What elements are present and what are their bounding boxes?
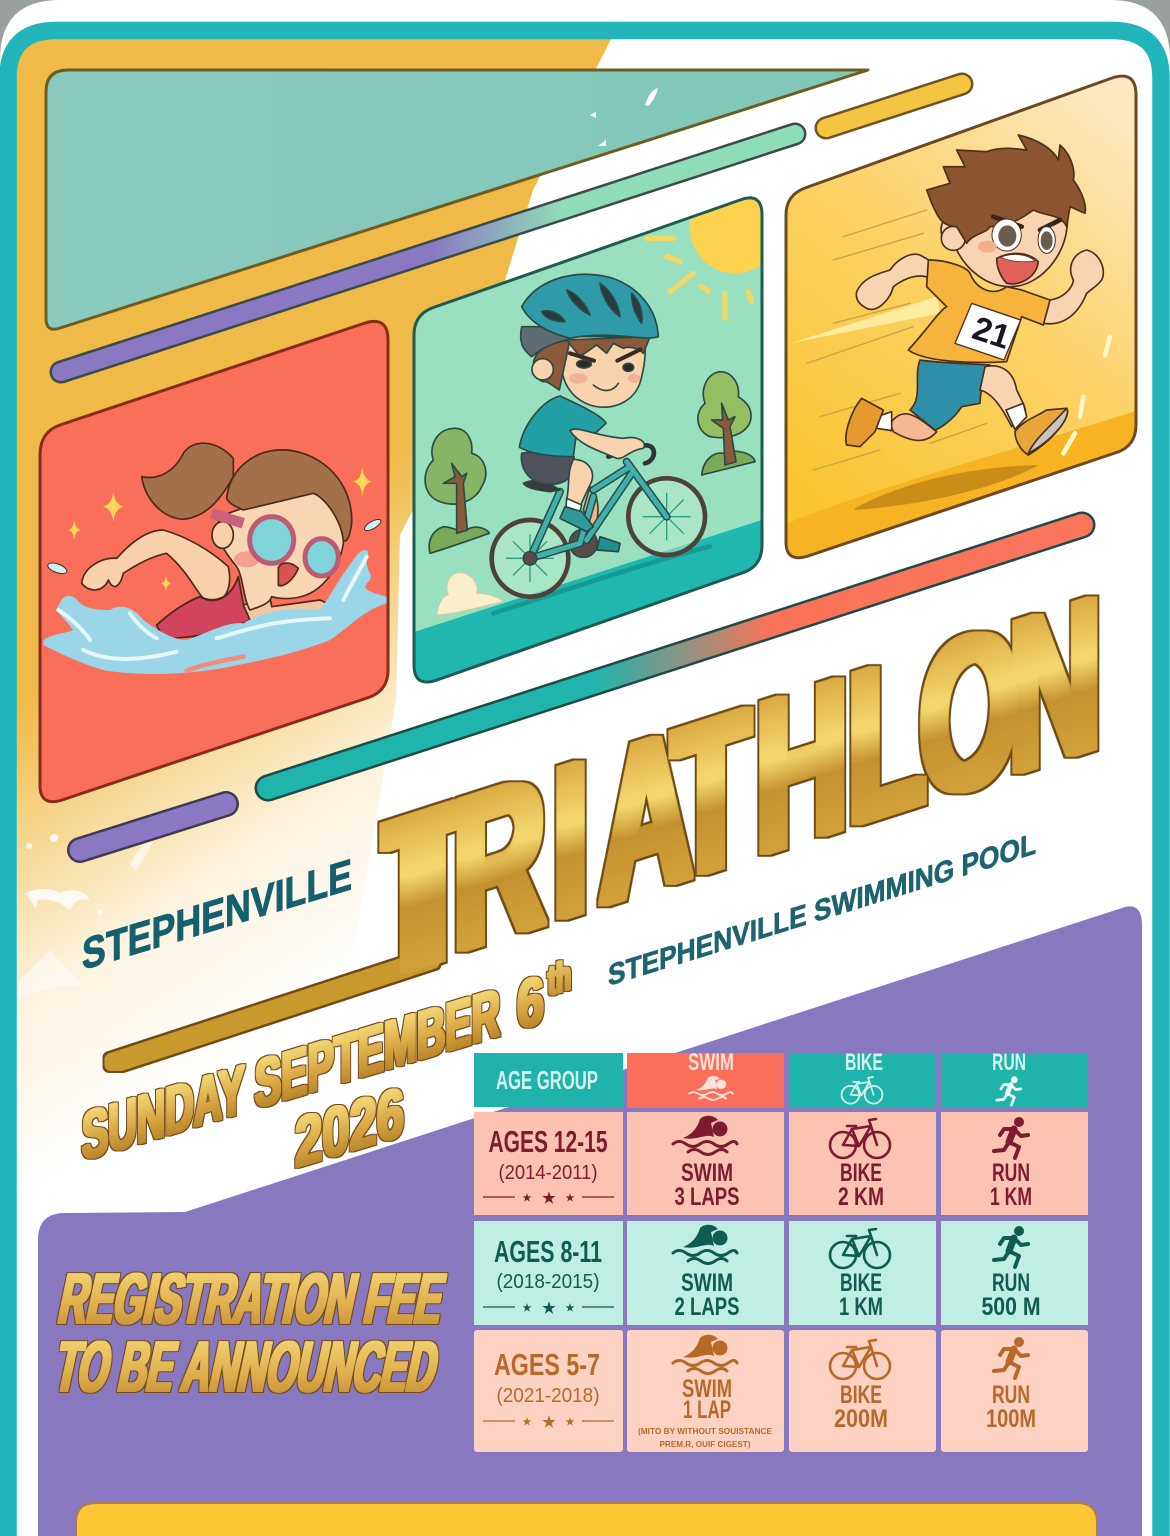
date line: SUNDAY SEPTEMBER <box>82 973 500 1175</box>
white splashes on gold background <box>16 832 158 1000</box>
date line <box>82 952 571 1175</box>
panel: cyclist <box>410 183 780 690</box>
gold diagonal background <box>8 30 616 1240</box>
row: ages 8-11: ★ <box>566 1303 575 1314</box>
date line: th <box>548 952 571 1005</box>
row: ages 12-15: 1 KM <box>990 1183 1032 1211</box>
panel: runner <box>780 76 1150 570</box>
panel: swimmer <box>40 321 388 802</box>
row: ages 8-11: BIKE <box>840 1269 882 1297</box>
purple to mint pill <box>61 134 795 372</box>
row: ages 8-11: 1 KM <box>839 1293 883 1321</box>
row: ages 12-15: ★ <box>566 1193 575 1204</box>
icon: swimmer girl <box>43 443 387 674</box>
row: ages 8-11: SWIM <box>681 1269 733 1297</box>
table header: AGE GROUP <box>496 1065 598 1095</box>
row: ages 5-7: 100M <box>986 1405 1036 1433</box>
table header: RUN <box>992 1049 1026 1076</box>
top teal banner shape <box>46 70 868 329</box>
registration fee callout: TO BE ANNOUNCED <box>49 1328 445 1407</box>
row: ages 12-15: BIKE <box>840 1159 882 1187</box>
row: ages 8-11: 500 M <box>982 1293 1040 1321</box>
row: ages 5-7: ★ <box>523 1417 532 1428</box>
row: ages 12-15 <box>474 1112 1088 1215</box>
runner panel outline <box>786 76 1136 558</box>
row: ages 12-15: AGES 12-15 <box>488 1124 608 1159</box>
table header: SWIM <box>688 1049 734 1076</box>
gold pill <box>826 84 962 128</box>
row: ages 12-15: 2 KM <box>838 1183 884 1211</box>
cyclist panel outline <box>414 198 762 682</box>
table header: BIKE <box>845 1049 883 1076</box>
row: ages 5-7: ★ <box>566 1417 575 1428</box>
row: ages 8-11: (2018-2015) <box>496 1271 600 1293</box>
row: ages 12-15: 3 LAPS <box>674 1183 740 1211</box>
row: ages 12-15: ★ <box>542 1190 556 1207</box>
heading: venue: STEPHENVILLE SWIMMING POOL <box>608 826 1036 993</box>
row: ages 5-7: 200M <box>834 1405 888 1433</box>
table header <box>474 1049 1088 1108</box>
row: ages 8-11: AGES 8-11 <box>494 1234 602 1269</box>
row: ages 8-11: ★ <box>542 1300 556 1317</box>
table: age groups and distances <box>474 1049 1088 1452</box>
row: ages 5-7: (MITO BY WITHOUT SOUISTANCE <box>638 1427 773 1436</box>
row: ages 8-11 <box>474 1221 1088 1325</box>
row: ages 12-15: SWIM <box>681 1159 733 1187</box>
yellow bottom bar <box>76 1503 1097 1536</box>
row: ages 12-15: (2014-2011) <box>498 1162 598 1184</box>
row: ages 5-7 <box>474 1330 1088 1452</box>
row: ages 5-7: PREM.R, OUIF CIGEST) <box>660 1440 751 1449</box>
row: ages 5-7: SWIM <box>682 1375 732 1403</box>
heading: Stephenville: STEPHENVILLE <box>82 849 352 980</box>
registration fee callout: REGISTRATION FEE <box>53 1260 451 1339</box>
row: ages 5-7: 1 LAP <box>683 1396 731 1424</box>
row: ages 12-15: ★ <box>523 1193 532 1204</box>
row: ages 8-11: RUN <box>992 1269 1030 1297</box>
race number: 21 <box>968 310 1015 357</box>
title: Triathlon in gold with underline bar: TRIATHLON <box>383 550 1101 1021</box>
icon: cyclist scene <box>416 199 760 681</box>
date year: 2026 <box>295 1072 404 1183</box>
teal to coral pill <box>268 525 1082 788</box>
date line: 6 <box>517 960 544 1045</box>
title: Triathlon in gold with underline bar <box>116 550 1101 1062</box>
registration fee callout <box>49 1260 451 1407</box>
row: ages 8-11: ★ <box>523 1303 532 1314</box>
purple pill <box>80 804 226 850</box>
row: ages 5-7: BIKE <box>840 1381 882 1409</box>
row: ages 5-7: ★ <box>542 1414 556 1431</box>
row: ages 12-15: RUN <box>992 1159 1030 1187</box>
purple lower panel <box>38 906 1142 1536</box>
row: ages 5-7: RUN <box>992 1381 1030 1409</box>
icon: runner scene <box>780 135 1150 570</box>
row: ages 5-7: (2021-2018) <box>496 1385 600 1407</box>
row: ages 5-7: AGES 5-7 <box>494 1347 600 1382</box>
row: ages 8-11: 2 LAPS <box>674 1293 740 1321</box>
